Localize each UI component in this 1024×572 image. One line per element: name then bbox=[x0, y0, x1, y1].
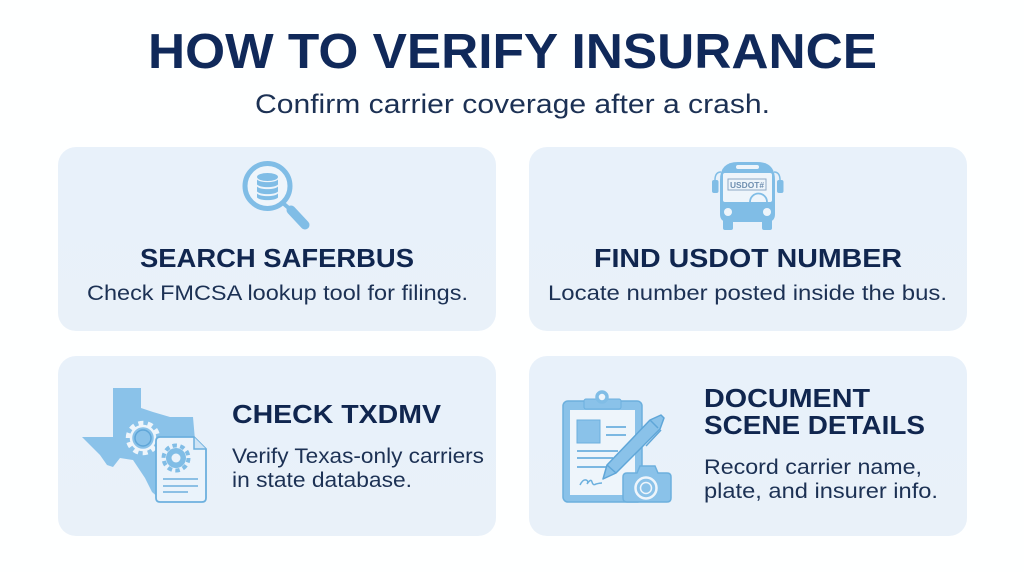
text: document scene details description bbox=[704, 456, 938, 503]
text: search saferbus description: Check FMCSA lookup tool for filings. bbox=[87, 282, 468, 305]
icon: texas map with gears and document bbox=[82, 388, 206, 502]
icon: bus with usdot placard bbox=[712, 162, 784, 230]
heading: find usdot number: FIND USDOT NUMBER bbox=[594, 245, 902, 273]
heading: check txdmv: CHECK TXDMV bbox=[232, 401, 441, 429]
heading: search saferbus: SEARCH SAFERBUS bbox=[140, 245, 414, 273]
panel: check txdmv bbox=[58, 356, 496, 536]
icon: magnifier with database bbox=[245, 164, 305, 225]
label: usdot placard text: USDOT# bbox=[730, 180, 764, 190]
panel: find usdot number bbox=[529, 147, 967, 331]
text: document scene details description: plate, and insurer info. bbox=[704, 480, 938, 503]
panel: document scene details bbox=[529, 356, 967, 536]
icon: clipboard with pen and camera bbox=[563, 392, 671, 502]
text: check txdmv description: Verify Texas-only carriers bbox=[232, 445, 484, 468]
subtitle: Confirm carrier coverage after a crash. bbox=[255, 89, 770, 119]
heading: document scene details bbox=[704, 385, 925, 440]
title: HOW TO VERIFY INSURANCE bbox=[148, 25, 877, 79]
panel: search saferbus bbox=[58, 147, 496, 331]
text: document scene details description: Record carrier name, bbox=[704, 456, 922, 479]
text: check txdmv description bbox=[232, 445, 484, 492]
heading: document scene details: SCENE DETAILS bbox=[704, 412, 925, 440]
text: check txdmv description: in state database. bbox=[232, 469, 412, 492]
heading: document scene details: DOCUMENT bbox=[704, 385, 870, 413]
text: find usdot number description: Locate number posted inside the bus. bbox=[548, 282, 947, 305]
